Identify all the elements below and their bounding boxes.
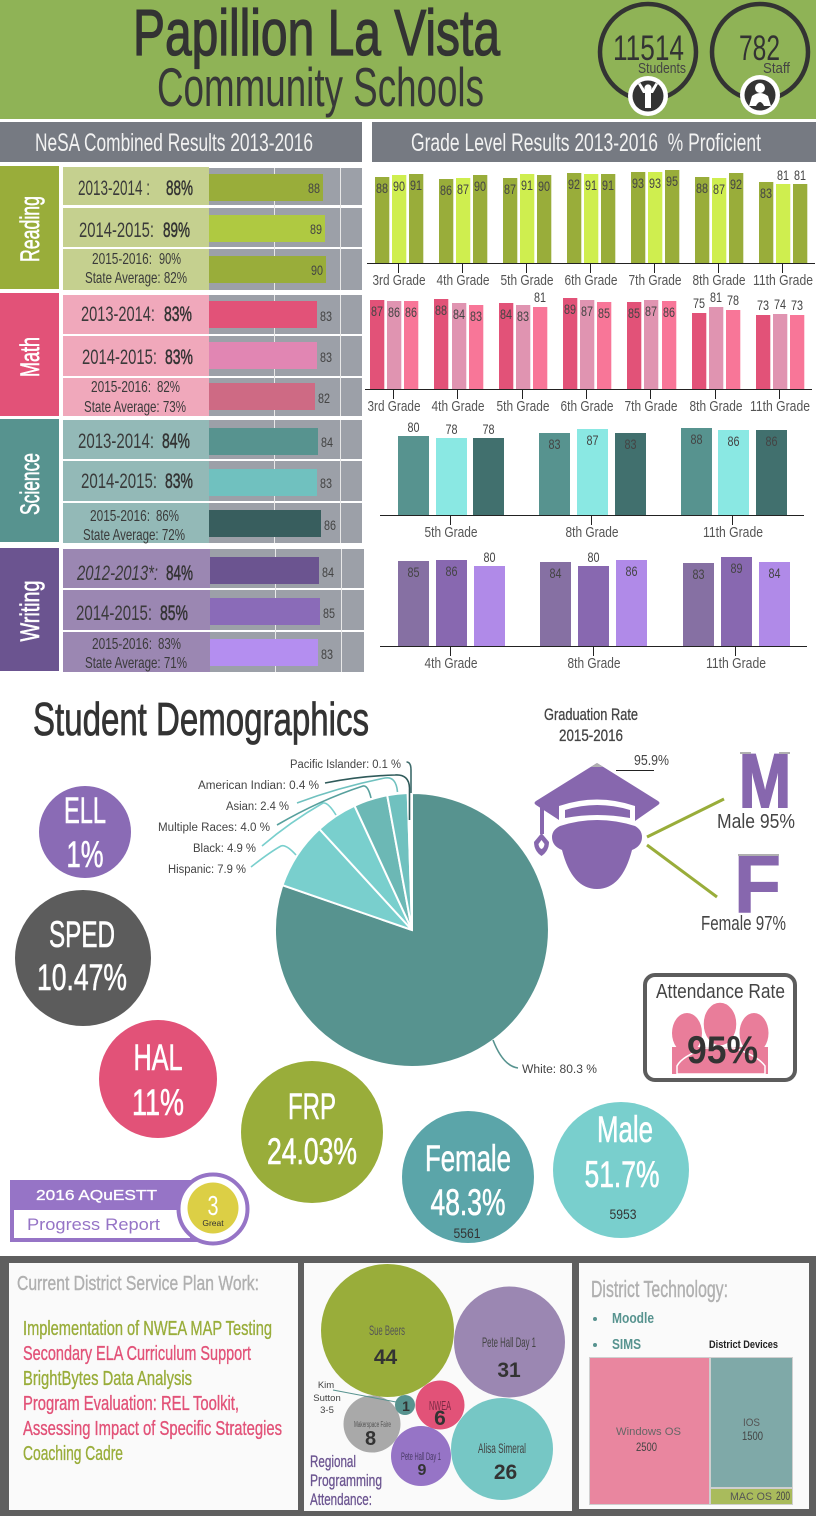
- panel: science results: State Average: 72%: [83, 527, 185, 544]
- 4th grade bars: 4th Grade: [424, 655, 478, 672]
- panel: district technology: [579, 1263, 809, 1509]
- bubble: NWEA: 6: [434, 1407, 446, 1430]
- stat circle: male: Male: [597, 1109, 653, 1150]
- 8th grade bars: 75: [693, 295, 705, 311]
- stat circle: male: [553, 1102, 689, 1238]
- callout: asian: Asian: 2.4 %: [226, 801, 289, 813]
- panel: science results: 2014-2015:: [81, 470, 157, 493]
- 4th grade bars: [436, 175, 490, 289]
- 7th grade bars: [628, 170, 682, 289]
- bubble: NWEA: [416, 1380, 464, 1430]
- panel: reading results: 89: [310, 221, 322, 237]
- callout: hispanic: Hispanic: 7.9 %: [168, 864, 246, 876]
- caption: regional programming attendance: [310, 1452, 382, 1509]
- 3rd grade bars: 3rd Grade: [368, 398, 420, 415]
- bar chart: reading by grade: [367, 167, 815, 289]
- 3rd grade bars: 91: [410, 177, 422, 193]
- bubble: Kim Sutton: Kim: [318, 1380, 334, 1391]
- 11th grade bars: 81: [777, 167, 789, 183]
- bar chart: math by grade: [365, 289, 812, 415]
- panel: math results: 2013-2014:: [81, 303, 155, 326]
- panel: math results: [0, 293, 362, 416]
- icon: adult with child: [740, 75, 780, 115]
- bubble: Makerspace Faire: [344, 1396, 400, 1452]
- stat circle: SPED: 10.47%: [37, 957, 127, 998]
- panel: writing results: 2014-2015:: [76, 602, 152, 625]
- treemap: district devices: 2500: [636, 1440, 657, 1454]
- panel: reading results: Reading: [15, 196, 45, 262]
- bubble: Pete Hall Day 1 small: 9: [418, 1462, 427, 1479]
- treemap: district devices: 1500: [742, 1429, 763, 1443]
- list: platforms: Moodle: [612, 1310, 654, 1327]
- callout: multiple races: [158, 786, 371, 834]
- stat circle: ELL: ELL: [64, 790, 106, 831]
- bubble: Alisa Simeral: 26: [494, 1461, 517, 1484]
- panel: attendance rate: [645, 975, 795, 1080]
- panel: reading results: 89%: [163, 219, 190, 242]
- 4th grade bars: 85: [408, 564, 420, 580]
- 6th grade bars: 91: [602, 177, 614, 193]
- panel: math results: Math: [15, 337, 45, 377]
- badge: AQuESTT progress report: [10, 1174, 248, 1244]
- 3rd grade bars: [372, 174, 426, 289]
- panel: reading results: 88%: [166, 177, 193, 200]
- bubble: Pete Hall Day 1: Pete Hall Day 1: [482, 1334, 536, 1350]
- 8th grade bars: 8th Grade: [690, 398, 742, 415]
- treemap: district devices: MAC OS: [730, 1491, 772, 1503]
- 7th grade bars: 7th Grade: [628, 272, 682, 289]
- stat circle: SPED: [15, 890, 151, 1026]
- panel: district service plan: [9, 1263, 298, 1510]
- 4th grade bars: 80: [484, 549, 496, 565]
- 4th grade bars: 84: [453, 306, 465, 322]
- list: platforms: [593, 1310, 654, 1353]
- 8th grade bars: 88: [696, 180, 708, 196]
- panel: math results: 83: [320, 349, 332, 365]
- header band: [0, 0, 816, 119]
- caption: regional programming attendance: Regional: [310, 1452, 356, 1471]
- panel: writing results: 2015-2016:: [92, 636, 152, 653]
- 8th grade bars: 80: [588, 549, 600, 565]
- callout: black: [193, 803, 336, 855]
- icon: three people: [672, 1002, 768, 1074]
- stat circle: female: 48.3%: [430, 1182, 506, 1223]
- panel: reading results: 90%: [159, 251, 181, 268]
- callout: black: Black: 4.9 %: [193, 843, 256, 855]
- pie chart: ethnicity: [158, 759, 597, 1076]
- panel: science results: 2013-2014:: [78, 430, 154, 453]
- treemap: district devices: Windows OS: [616, 1426, 681, 1438]
- 5th grade bars: 83: [517, 308, 529, 324]
- 5th grade bars: [398, 419, 504, 541]
- panel: reading results: State Average: 82%: [85, 270, 187, 287]
- bubble: Makerspace Faire: Makerspace Faire: [354, 1420, 391, 1429]
- panel: science results: 86%: [156, 508, 179, 525]
- callout: pacific islander: [290, 759, 411, 793]
- stat circle: FRP: [241, 1061, 383, 1203]
- 8th grade bars: 8th Grade: [692, 272, 746, 289]
- stat circle: FRP: 24.03%: [267, 1131, 357, 1172]
- treemap: district devices: IOS: [743, 1417, 760, 1429]
- panel: reading results: 2015-2016:: [92, 251, 152, 268]
- heading: graduation rate: 2015-2016: [559, 726, 623, 745]
- 11th grade bars: 73: [757, 297, 769, 313]
- 5th grade bars: [496, 289, 550, 415]
- stat: female graduation: [701, 839, 786, 935]
- panel: writing results: 83%: [158, 636, 181, 653]
- 8th grade bars: 92: [730, 176, 742, 192]
- title: [133, 0, 501, 118]
- 8th grade bars: 81: [710, 289, 722, 305]
- 6th grade bars: 91: [585, 177, 597, 193]
- bubble: Pete Hall Day 1: [454, 1286, 565, 1398]
- 3rd grade bars: 3rd Grade: [372, 272, 426, 289]
- badge: AQuESTT progress report: 3: [208, 1190, 218, 1221]
- panel: writing results: State Average: 71%: [85, 655, 187, 672]
- caption: regional programming attendance: Programming: [310, 1471, 382, 1490]
- 11th grade bars: 86: [766, 433, 778, 449]
- 6th grade bars: 6th Grade: [564, 272, 618, 289]
- panel: district service plan: Current District Service Plan Work:: [17, 1273, 259, 1295]
- stat: female graduation: F: [734, 839, 781, 930]
- bubble: Pete Hall Day 1 small: Pete Hall Day 1: [401, 1451, 441, 1463]
- 11th grade bars: 89: [730, 560, 743, 576]
- label: 95.9%: 95.9%: [634, 752, 669, 769]
- stat circle: female: [402, 1111, 534, 1243]
- 4th grade bars: 86: [446, 563, 458, 579]
- bubble: Kim Sutton: [313, 1380, 415, 1416]
- 8th grade bars: 83: [624, 436, 637, 452]
- panel: reading results: 88: [308, 180, 320, 196]
- 11th grade bars: [750, 296, 810, 415]
- stat circle: male: 5953: [610, 1206, 637, 1222]
- panel: reading results: 2014-2015:: [79, 219, 154, 242]
- 5th grade bars: 84: [500, 306, 512, 322]
- 4th grade bars: 83: [470, 308, 482, 324]
- 8th grade bars: [539, 429, 646, 541]
- 5th grade bars: 78: [446, 421, 458, 437]
- panel: math results: State Average: 73%: [84, 399, 186, 416]
- panel: math results: 82%: [157, 379, 180, 396]
- 3rd grade bars: [368, 300, 420, 415]
- panel: writing results: 84: [322, 564, 334, 580]
- callout: pacific islander: Pacific Islander: 0.1 %: [290, 759, 401, 771]
- 8th grade bars: [690, 289, 742, 415]
- heading: student demographics: Student Demographics: [33, 693, 369, 745]
- bubble: NWEA: NWEA: [429, 1398, 451, 1413]
- 11th grade bars: [753, 167, 813, 289]
- list of initiatives: Assessing Impact of Specific Strategies: [23, 1418, 282, 1440]
- 3rd grade bars: 87: [371, 303, 383, 319]
- 7th grade bars: 7th Grade: [624, 398, 678, 415]
- 11th grade bars: 81: [794, 167, 806, 183]
- panel: science results: 2015-2016:: [90, 508, 150, 525]
- bubble: Kim Sutton: Sutton: [313, 1393, 341, 1404]
- 11th grade bars: [681, 428, 787, 541]
- bar chart: science by grade: [380, 419, 804, 541]
- panel: writing results: [0, 548, 364, 672]
- 5th grade bars: 5th Grade: [500, 272, 554, 289]
- bubble: Sue Beers: 44: [374, 1346, 397, 1369]
- 11th grade bars: 11th Grade: [706, 655, 766, 672]
- 11th grade bars: 11th Grade: [703, 524, 763, 541]
- treemap: district devices: [589, 1339, 793, 1505]
- callout: asian: [226, 778, 398, 813]
- 8th grade bars: 8th Grade: [566, 524, 618, 541]
- 8th grade bars: 84: [550, 565, 562, 581]
- badge: AQuESTT progress report: Great: [202, 1218, 224, 1228]
- 3rd grade bars: 86: [388, 304, 400, 320]
- stat: students: 11514: [613, 29, 684, 68]
- 8th grade bars: 87: [586, 432, 599, 448]
- title: Community Schools: [157, 56, 484, 118]
- panel: math results: 83%: [165, 346, 193, 369]
- 7th grade bars: 85: [628, 305, 640, 321]
- panel: writing results: 2012-2013*:: [76, 562, 158, 585]
- 5th grade bars: 5th Grade: [424, 524, 478, 541]
- stat circle: HAL: HAL: [134, 1037, 182, 1078]
- panel: district technology: District Technology:: [591, 1276, 728, 1302]
- list of initiatives: Coaching Cadre: [23, 1443, 123, 1465]
- 11th grade bars: 83: [692, 566, 705, 582]
- 8th grade bars: [692, 173, 746, 289]
- stat circle: HAL: [99, 1020, 217, 1138]
- section heading: grade level results: [372, 122, 816, 162]
- 7th grade bars: 95: [666, 173, 678, 189]
- bubble: Pete Hall Day 1: 31: [497, 1359, 521, 1382]
- panel: reading results: 90: [311, 262, 323, 278]
- 8th grade bars: 86: [626, 563, 638, 579]
- 11th grade bars: [683, 557, 790, 672]
- 7th grade bars: [624, 300, 678, 415]
- bubble: Kim Sutton: 1: [402, 1398, 410, 1414]
- panel: writing results: 85%: [160, 602, 188, 625]
- stat: female graduation: Female 97%: [701, 913, 786, 935]
- panel: science results: 84%: [162, 430, 190, 453]
- 7th grade bars: 93: [649, 175, 661, 191]
- bubble: Pete Hall Day 1 small: [391, 1426, 451, 1486]
- 3rd grade bars: 90: [393, 178, 405, 194]
- icon: graduate head and cap: [534, 763, 660, 889]
- 5th grade bars: 80: [408, 419, 420, 435]
- stat: students: Students: [638, 60, 686, 77]
- 5th grade bars: 87: [504, 181, 516, 197]
- bottom band: [0, 1256, 816, 1516]
- list of initiatives: Implementation of NWEA MAP Testing: [23, 1318, 272, 1340]
- bubble: Alisa Simeral: [451, 1398, 553, 1500]
- 3rd grade bars: 86: [405, 304, 417, 320]
- 4th grade bars: 4th Grade: [436, 272, 490, 289]
- 4th grade bars: 88: [435, 302, 447, 318]
- bubble: Sue Beers: [321, 1264, 454, 1397]
- 8th grade bars: 83: [548, 436, 561, 452]
- 8th grade bars: 87: [713, 181, 725, 197]
- panel: reading results: 2013-2014 :: [78, 177, 150, 200]
- connector: male: [647, 799, 724, 837]
- bubble: Sue Beers: Sue Beers: [369, 1322, 405, 1338]
- 5th grade bars: 91: [521, 177, 533, 193]
- 7th grade bars: 86: [663, 304, 675, 320]
- section heading: NeSA combined results: [0, 122, 362, 162]
- 11th grade bars: 73: [791, 297, 803, 313]
- 8th grade bars: [540, 549, 647, 672]
- callout: white: White: 80.3 %: [522, 1064, 597, 1076]
- heading: graduation rate: [544, 705, 638, 745]
- 3rd grade bars: 88: [376, 180, 388, 196]
- bar chart: writing by grade: [380, 549, 807, 672]
- stat circle: HAL: 11%: [132, 1082, 184, 1123]
- callout: multiple races: Multiple Races: 4.0 %: [158, 822, 270, 834]
- panel: math results: 83%: [164, 303, 192, 326]
- list of initiatives: Secondary ELA Curriculum Support: [23, 1343, 251, 1365]
- 6th grade bars: 85: [598, 305, 610, 321]
- bubble: Kim Sutton: 3-5: [320, 1405, 334, 1416]
- stat: students: [600, 4, 696, 116]
- 5th grade bars: [500, 174, 554, 289]
- 5th grade bars: 78: [482, 421, 495, 437]
- label: 95.9%: [616, 752, 669, 771]
- stat circle: female: 5561: [454, 1225, 481, 1241]
- panel: science results: 83%: [165, 470, 193, 493]
- badge: AQuESTT progress report: Progress Report: [27, 1215, 160, 1234]
- connector: female: [647, 845, 717, 897]
- heading: graduation rate: Graduation Rate: [544, 705, 638, 724]
- 11th grade bars: 86: [728, 433, 740, 449]
- list of initiatives: [23, 1318, 282, 1465]
- caption: regional programming attendance: Attendance:: [310, 1490, 372, 1509]
- stat: staff: [712, 4, 808, 115]
- 4th grade bars: [432, 299, 484, 415]
- panel: writing results: 83: [321, 646, 333, 662]
- panel: science results: 86: [324, 517, 336, 533]
- 6th grade bars: 92: [568, 176, 580, 192]
- 5th grade bars: 81: [534, 289, 546, 305]
- stat: male graduation: [717, 739, 795, 833]
- panel: regional programming attendance: [304, 1263, 572, 1511]
- 11th grade bars: 74: [774, 296, 786, 312]
- 11th grade bars: 83: [760, 185, 772, 201]
- 5th grade bars: 90: [538, 178, 550, 194]
- panel: writing results: Writing: [15, 580, 45, 642]
- stat: male graduation: M: [739, 739, 791, 824]
- bubble: Alisa Simeral: Alisa Simeral: [478, 1440, 526, 1456]
- panel: science results: Science: [15, 453, 45, 515]
- section heading: NeSA combined results: NeSA Combined Results 2013-2016: [35, 129, 313, 157]
- callout: american indian: [198, 775, 410, 820]
- 11th grade bars: 84: [768, 565, 781, 581]
- 6th grade bars: [564, 173, 618, 289]
- 5th grade bars: 5th Grade: [496, 398, 550, 415]
- 4th grade bars: [398, 549, 505, 672]
- treemap: district devices: District Devices: [709, 1339, 778, 1351]
- 4th grade bars: 86: [440, 182, 452, 198]
- 4th grade bars: 4th Grade: [432, 398, 484, 415]
- 11th grade bars: 88: [690, 431, 703, 447]
- stat circle: male: 51.7%: [584, 1154, 660, 1195]
- 6th grade bars: 87: [581, 303, 593, 319]
- 4th grade bars: 90: [474, 178, 486, 194]
- 6th grade bars: 89: [564, 301, 576, 317]
- 8th grade bars: 78: [727, 292, 739, 308]
- panel: math results: 2015-2016:: [91, 379, 151, 396]
- panel: writing results: 84%: [166, 562, 193, 585]
- 8th grade bars: 8th Grade: [568, 655, 620, 672]
- panel: attendance rate: 95%: [687, 1029, 758, 1072]
- panel: reading results: [0, 166, 362, 290]
- panel: math results: 83: [320, 308, 332, 324]
- callout: hispanic: [168, 846, 296, 876]
- panel: math results: 82: [318, 390, 330, 406]
- 7th grade bars: 87: [645, 303, 657, 319]
- list of initiatives: BrightBytes Data Analysis: [23, 1368, 192, 1390]
- panel: science results: 84: [321, 434, 333, 450]
- 7th grade bars: 93: [632, 175, 644, 191]
- treemap: district devices: 200: [776, 1489, 790, 1503]
- panel: science results: [0, 419, 362, 544]
- stat circle: SPED: SPED: [49, 914, 115, 955]
- list of initiatives: Program Evaluation: REL Toolkit,: [23, 1393, 239, 1415]
- panel: attendance rate: Attendance Rate: [656, 981, 785, 1003]
- panel: writing results: 85: [323, 605, 335, 621]
- icon: child with raised arms: [628, 76, 668, 116]
- callout: american indian: American Indian: 0.4 %: [198, 780, 319, 792]
- badge: AQuESTT progress report: 2016 AQuESTT: [36, 1187, 157, 1204]
- 6th grade bars: [560, 298, 614, 415]
- stat circle: ELL: [39, 786, 131, 878]
- stat: staff: 782: [739, 29, 780, 68]
- panel: science results: 83: [320, 475, 332, 491]
- panel: math results: 2014-2015:: [82, 346, 157, 369]
- stat circle: ELL: 1%: [66, 834, 104, 875]
- stat: staff: Staff: [763, 60, 791, 77]
- 4th grade bars: 87: [457, 181, 469, 197]
- stat circle: FRP: FRP: [288, 1086, 336, 1127]
- callout: white: [493, 1040, 597, 1076]
- stat: male graduation: Male 95%: [717, 811, 795, 833]
- list: platforms: SIMS: [612, 1336, 641, 1353]
- bubble: Makerspace Faire: 8: [365, 1428, 376, 1450]
- stat circle: female: Female: [425, 1138, 511, 1179]
- 6th grade bars: 6th Grade: [560, 398, 614, 415]
